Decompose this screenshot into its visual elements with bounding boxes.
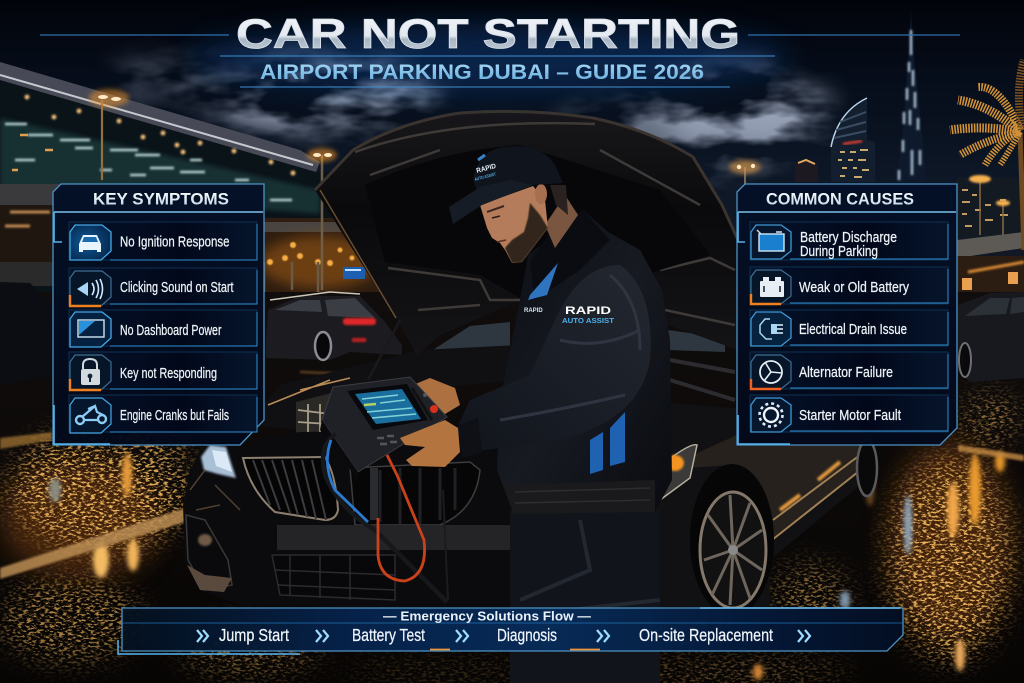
step: diagnosis: [456, 625, 557, 645]
label: No Ignition Response: [120, 234, 230, 250]
step: on-site replacement: On-site Replacement: [639, 625, 773, 645]
hood top surface: [245, 345, 520, 430]
engine bay: [296, 392, 335, 435]
title glow: [190, 24, 790, 92]
windshield: [425, 322, 725, 355]
sleeve logo: RAPID: [565, 305, 611, 317]
icon: dashboard screen: [70, 312, 111, 347]
ground reflections: [0, 380, 1024, 683]
car body right side: [560, 400, 878, 610]
right parked car: [958, 292, 1024, 382]
jacket waistband: [505, 480, 655, 514]
cap: [449, 146, 563, 224]
label: During Parking: [800, 244, 878, 260]
row: engine cranks: [69, 395, 257, 433]
front wheel: [690, 464, 774, 616]
bar accents: [122, 622, 902, 624]
scanner screen: [355, 389, 421, 424]
label: [800, 230, 897, 260]
panel corner glow: [738, 212, 790, 444]
mechanic: [413, 146, 672, 683]
label: Electrical Drain Issue: [799, 322, 907, 338]
title block: [40, 10, 960, 87]
title: CAR NOT STARTING: [236, 10, 740, 57]
panel: emergency solutions flow: [118, 608, 903, 654]
panel frame: [53, 184, 264, 445]
left grille: [243, 457, 338, 520]
step: battery test: [316, 625, 425, 645]
row: alternator: [750, 352, 948, 389]
icon: crank: [70, 398, 111, 433]
step: diagnosis: Diagnosis: [497, 625, 557, 645]
row: clicking sound: [69, 268, 257, 306]
right city buildings and overpass: [957, 175, 1024, 298]
hood underside ribs: [355, 123, 735, 325]
street lamp posts: [89, 89, 337, 290]
lower intake: [272, 555, 395, 600]
panel: key symptoms: [53, 184, 264, 445]
right grille: [350, 462, 480, 525]
row: starter motor: [750, 395, 948, 432]
night sky: [0, 0, 1024, 400]
title rules: [40, 35, 960, 87]
chest logo text: RAPID: [524, 308, 543, 314]
hood prop rod: [368, 320, 400, 380]
skyline: Burj Khalifa: [897, 10, 927, 182]
panel heading: COMMON CAUSES: [766, 190, 914, 208]
icon: gear: [751, 398, 791, 432]
label: No Dashboard Power: [120, 323, 222, 339]
cuff: [458, 418, 482, 458]
panel: common causes: [737, 184, 957, 445]
label: Starter Motor Fault: [799, 408, 901, 424]
chest blue patch: [528, 263, 558, 300]
row: battery discharge: [750, 222, 948, 260]
left headlight: [201, 445, 236, 478]
icon: battery discharge: [751, 225, 791, 259]
panel corner glow: [54, 212, 110, 444]
step: on-site replacement: [597, 625, 773, 645]
skyline: small tower and street lamp: [729, 159, 818, 184]
collar: [530, 210, 610, 300]
right headlight: [655, 445, 697, 500]
cables: [323, 434, 447, 602]
label: Battery Discharge: [800, 230, 897, 246]
upper hand: [413, 378, 460, 414]
diagnostic scanner: [320, 377, 460, 602]
red car: [266, 292, 402, 385]
airport terminal: [0, 62, 404, 320]
open hood: [315, 111, 738, 380]
step: jump start: [197, 625, 289, 645]
cap: AUTO ASSIST: [474, 171, 497, 182]
bumper panel: [277, 525, 517, 550]
sleeve logo: AUTO ASSIST: [562, 318, 615, 325]
cap: RAPID: [476, 163, 497, 175]
panel heading: KEY SYMPTOMS: [93, 190, 229, 208]
row: key not responding: [69, 352, 257, 390]
trousers: [510, 510, 660, 683]
bar frame: [122, 608, 903, 651]
icon: speaker: [70, 271, 111, 306]
label: Alternator Failure: [799, 365, 893, 381]
icon: padlock: [70, 355, 111, 390]
palm tree: [950, 60, 1024, 250]
arm: [455, 265, 651, 452]
blue side stripes: [590, 412, 625, 474]
scanner keypad and button: [430, 405, 438, 413]
icon: battery: [751, 270, 791, 304]
sleeve logo: [562, 305, 615, 325]
row: weak battery: [750, 267, 948, 304]
icon: alternator: [751, 355, 791, 389]
neck and head: [480, 184, 578, 263]
lower hand: [400, 420, 460, 467]
parking line markings: [0, 432, 1024, 579]
subtitle: AIRPORT PARKING DUBAI – GUIDE 2026: [260, 61, 704, 84]
icon: car: [70, 225, 111, 260]
car front mass: [183, 430, 520, 610]
label: Clicking Sound on Start: [120, 280, 234, 296]
label: Weak or Old Battery: [799, 280, 910, 296]
label: Engine Cranks but Fails: [120, 408, 229, 424]
wet ground: [0, 292, 1024, 683]
parked cars behind: [0, 282, 1024, 385]
panel frame: [737, 184, 957, 445]
rear wheel: [857, 440, 877, 496]
left bumper vent: [186, 515, 232, 590]
bar heading: — Emergency Solutions Flow —: [383, 610, 592, 624]
scanner bezel: [347, 384, 428, 430]
label: Key not Responding: [120, 366, 217, 382]
step: battery test: Battery Test: [352, 625, 425, 645]
left parked car: [0, 282, 55, 385]
skyline: sail tower: [831, 98, 875, 182]
jacket body: [497, 210, 672, 512]
row: electrical drain: [750, 310, 948, 346]
final arrow: [798, 630, 810, 642]
storm clouds: [110, 39, 844, 186]
icon: electrical: [751, 312, 791, 346]
main car: [183, 322, 878, 616]
step: jump start: Jump Start: [219, 625, 289, 645]
row: no dashboard power: [69, 310, 257, 347]
row: no ignition response: [69, 222, 257, 260]
